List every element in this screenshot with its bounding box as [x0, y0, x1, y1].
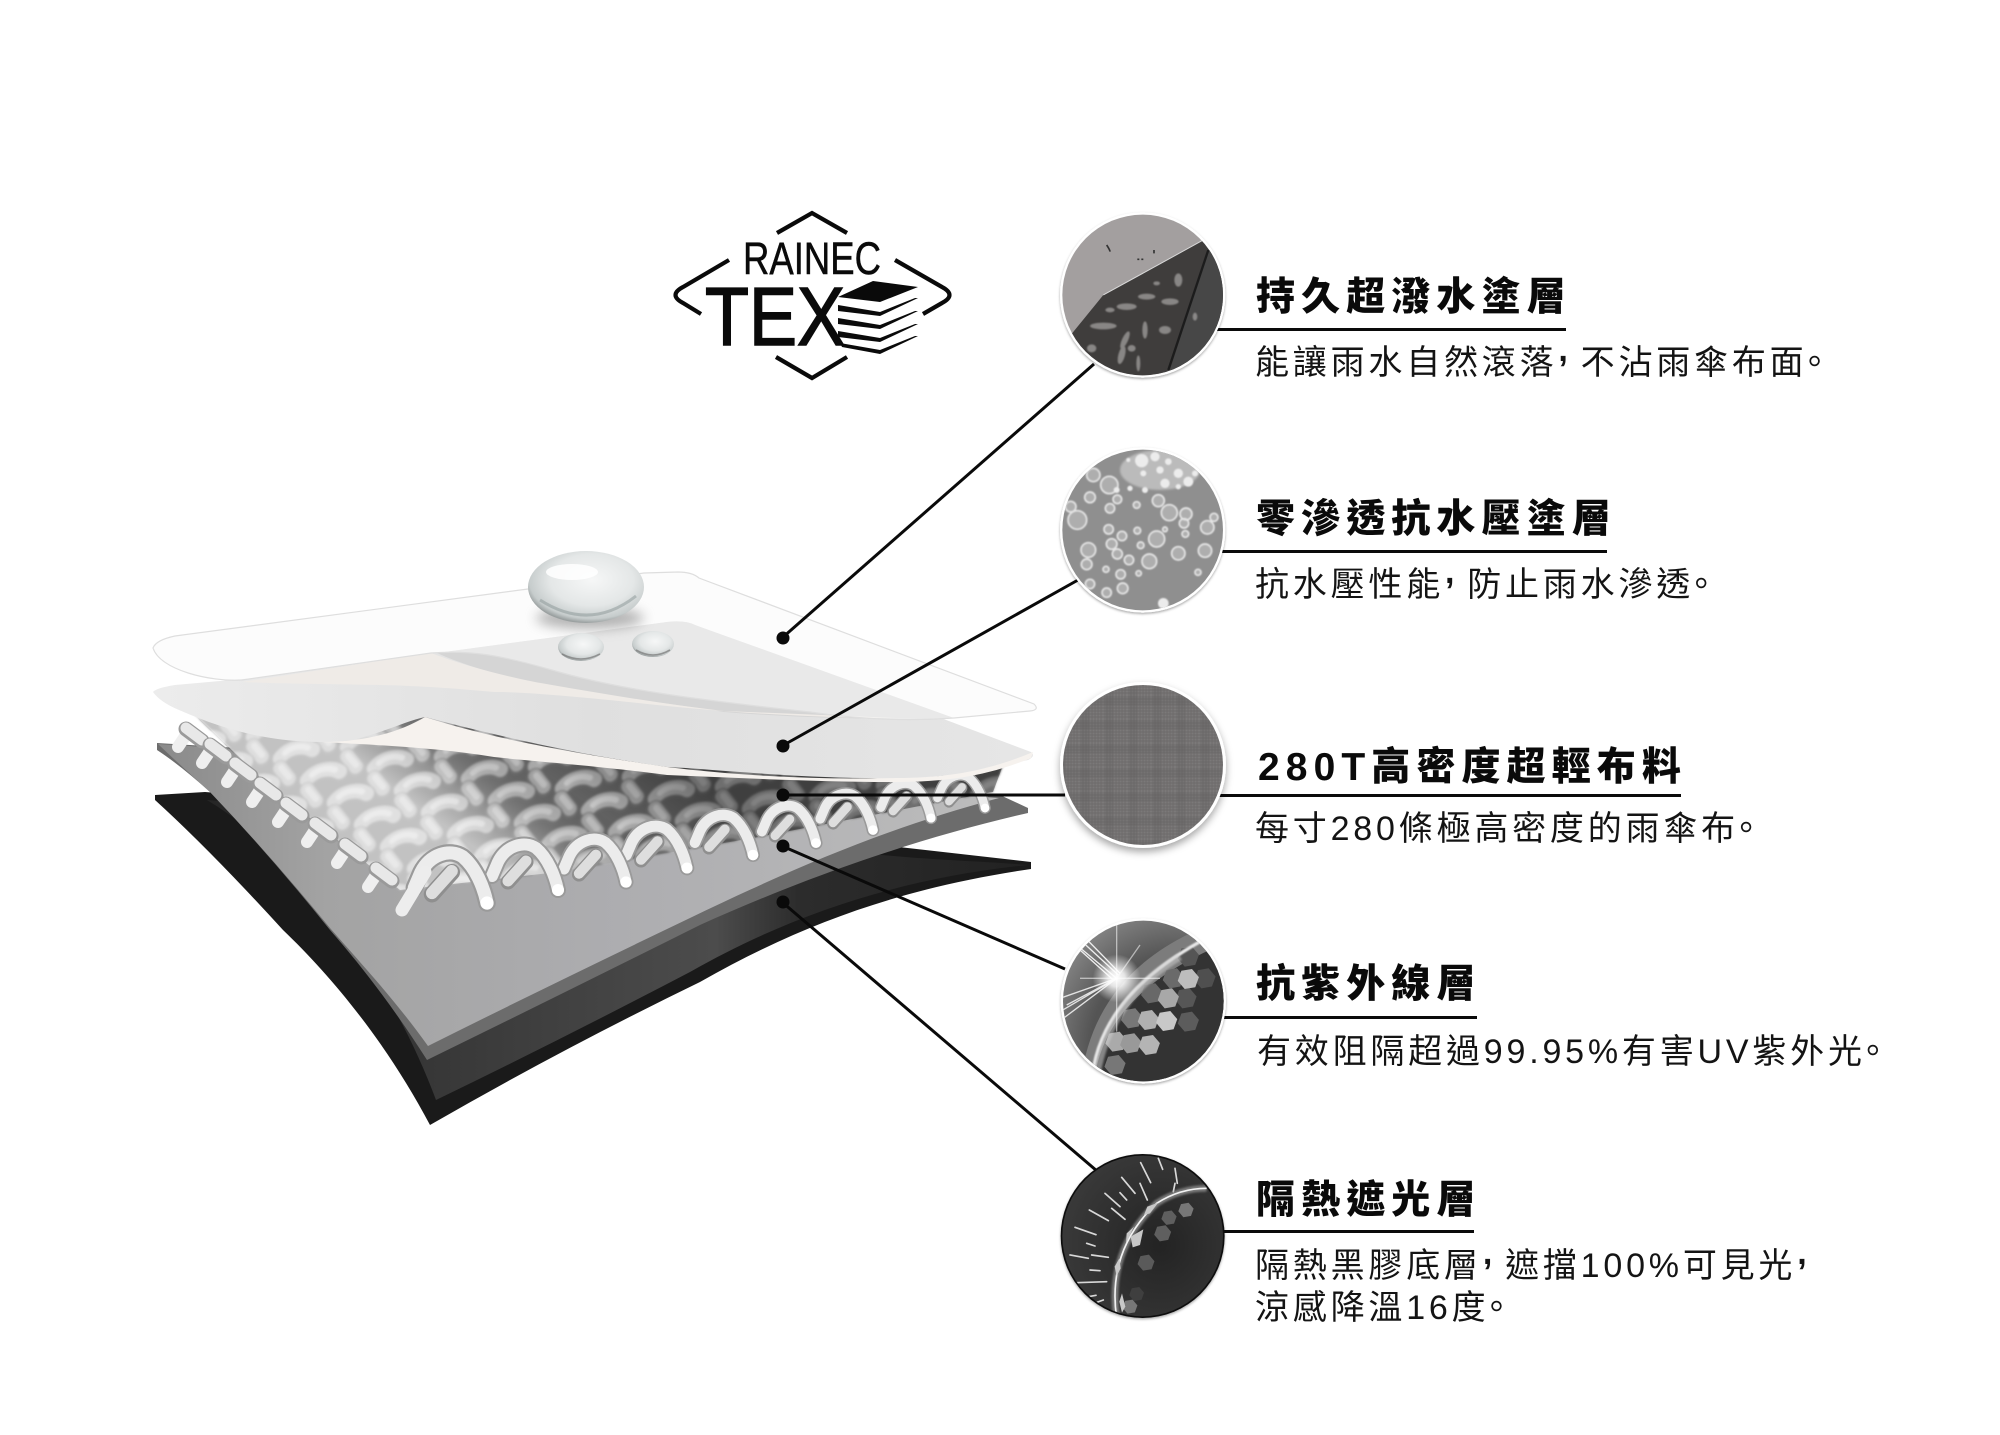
block 3 description: 每寸280條極高密度的雨傘布。	[1255, 810, 1767, 848]
water droplet shadow	[536, 607, 644, 629]
block 1: durable water-repellent coating	[1255, 275, 1835, 382]
circle: heat insulation close-up	[1060, 1150, 1227, 1323]
block 1 description: ,	[1558, 331, 1572, 369]
grey surface seen through film	[437, 621, 954, 719]
underlines	[1150, 328, 1681, 1233]
logo word TEX: TEX	[705, 270, 845, 363]
sheet underside fold	[322, 717, 1033, 782]
logo fabric stack icon	[838, 281, 918, 354]
block 5 description: 隔熱黑膠底層	[1255, 1247, 1482, 1285]
block 3: 280T fabric	[1255, 745, 1767, 848]
large water droplet	[528, 551, 644, 623]
dot 1	[776, 632, 790, 644]
block 2: zero-penetration coating	[1255, 497, 1722, 604]
leader line 5	[782, 902, 1097, 1171]
dot 3	[776, 788, 790, 802]
dot 4	[776, 840, 790, 852]
block 5 description: ,	[1797, 1234, 1810, 1272]
small water droplet right	[632, 631, 674, 657]
block 5 description: 遮擋100%可見光	[1505, 1247, 1796, 1285]
block 5: heat insulation layer	[1255, 1179, 1810, 1327]
leader dots	[776, 632, 790, 908]
circle: high-density 280T fabric close-up	[1060, 682, 1226, 848]
circle: water-repellent coating close-up	[1058, 212, 1227, 380]
leader line 4	[782, 846, 1065, 969]
leader lines	[782, 364, 1097, 1171]
dot 2	[776, 740, 790, 752]
circle: UV protection close-up	[1060, 915, 1233, 1088]
leader line 3	[782, 794, 1065, 796]
block 1 title: 持久超潑水塗層	[1256, 275, 1572, 319]
knit fringe: left edge stitches	[178, 728, 392, 887]
block 5 title: 隔熱遮光層	[1256, 1179, 1482, 1222]
block 2 description: ,	[1445, 553, 1458, 591]
layered fabric illustration	[153, 551, 1036, 1125]
block 4 description: 有效阻隔超過99.95%有害UV紫外光。	[1257, 1033, 1894, 1071]
logo bracket frame	[676, 213, 950, 378]
layer: silver UV-protection film	[157, 743, 1028, 1060]
block 1 description: 。	[1797, 344, 1835, 382]
logo word RAINEC: RAINEC	[743, 233, 881, 284]
block 1 description: 不沾雨傘布面	[1581, 344, 1807, 382]
dot 5	[776, 896, 790, 908]
cream upper fold	[242, 653, 896, 718]
layer: black heat-insulating base	[155, 792, 1031, 1125]
knit fringe: front edge stitches	[402, 775, 989, 910]
block 5 description: 涼感降溫16度。	[1255, 1289, 1517, 1327]
circle: water droplets close-up	[1060, 440, 1227, 620]
layer: knit 280T fabric	[178, 690, 1005, 910]
block 3 title: 280T高密度超輕布料	[1258, 745, 1687, 789]
layer: waterproof coating sheet	[153, 621, 1033, 782]
block 4 title: 抗紫外線層	[1256, 963, 1482, 1006]
block 2 title: 零滲透抗水壓塗層	[1256, 497, 1617, 541]
block 4: UV layer	[1256, 963, 1894, 1071]
logo: RAINEC TEX	[676, 213, 950, 378]
block 2 description: 。	[1684, 566, 1722, 604]
block 2 description: 防止雨水滲透	[1467, 566, 1694, 604]
leader line 1	[782, 364, 1094, 638]
layer: transparent super-hydrophobic film	[153, 572, 1036, 720]
block 2 description: 抗水壓性能	[1255, 566, 1444, 604]
block 5 description	[1255, 1234, 1810, 1327]
small water droplet left	[558, 633, 604, 661]
block 5 description: ,	[1483, 1234, 1496, 1272]
leader line 2	[782, 580, 1078, 746]
block 1 description: 能讓雨水自然滾落	[1255, 344, 1557, 382]
